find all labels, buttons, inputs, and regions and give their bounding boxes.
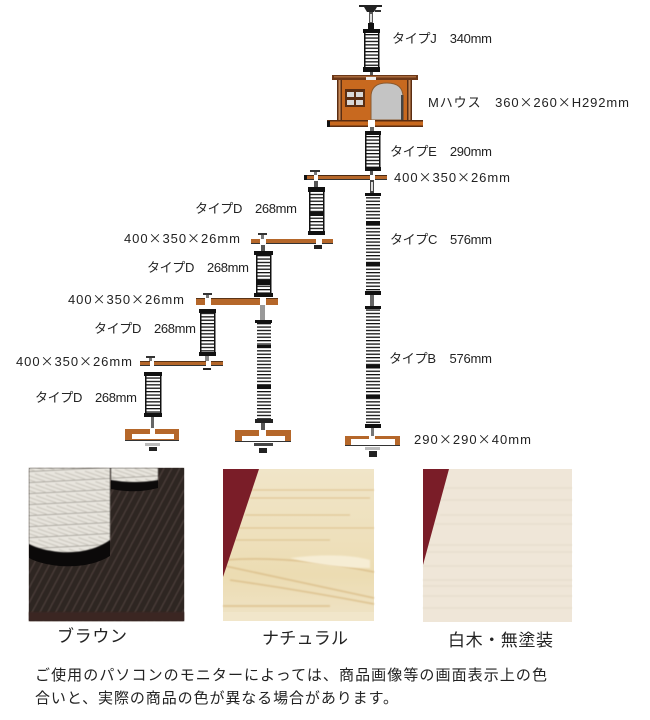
note: monitor colour disclaimer (35, 666, 547, 707)
shelf: top (304, 170, 387, 180)
column: type D upper (308, 181, 325, 235)
label: type D lower: タイプD 268mm (94, 321, 196, 336)
base: left (125, 429, 179, 451)
label: type D upper: タイプD 268mm (195, 201, 297, 216)
column: type D bottom (144, 372, 162, 428)
shelf: fourth (140, 356, 223, 370)
label: type D middle: タイプD 268mm (147, 260, 249, 275)
shelf: third (196, 293, 278, 305)
icon: house window (345, 89, 365, 107)
label: type E: タイプE 290mm (390, 144, 492, 159)
column: type E (365, 131, 381, 175)
photo: natural wood (223, 469, 374, 621)
label: second shelf size: 400×350×26mm (124, 228, 240, 247)
caption: natural: ナチュラル (262, 629, 348, 648)
icon: ceiling jack (359, 5, 382, 29)
column: type J (363, 29, 380, 76)
icon: house door (371, 83, 403, 120)
note: monitor colour disclaimer: ご使用のパソコンのモニターによっては、商品画像等の画面表示上の色 (35, 666, 547, 684)
base: right (345, 436, 400, 457)
column: type C (365, 180, 381, 306)
label: M house: Mハウス 360×260×H292mm (428, 92, 629, 111)
base: middle (235, 430, 291, 453)
label: type D bottom: タイプD 268mm (35, 390, 137, 405)
label: base size: 290×290×40mm (414, 429, 531, 448)
caption: white wood unpainted: 白木・無塗装 (448, 631, 553, 650)
label: type B: タイプB 576mm (389, 351, 492, 366)
column: type D lower (199, 309, 216, 361)
label: top shelf size: 400×350×26mm (394, 167, 510, 186)
shelf: second (251, 233, 333, 249)
column: type D middle (254, 245, 273, 297)
label: fourth shelf size: 400×350×26mm (16, 351, 132, 370)
photo: white wood (423, 469, 572, 622)
note: monitor colour disclaimer: 合いと、実際の商品の色が異なる場合があります。 (35, 690, 398, 707)
label: type J: タイプJ 340mm (392, 31, 492, 46)
caption: brown: ブラウン (57, 626, 127, 646)
column: type B (365, 306, 381, 436)
column: middle long (255, 305, 273, 430)
label: type C: タイプC 576mm (390, 232, 492, 247)
photo: brown (29, 468, 184, 621)
icon: M house (327, 75, 423, 131)
label: third shelf size: 400×350×26mm (68, 289, 184, 308)
